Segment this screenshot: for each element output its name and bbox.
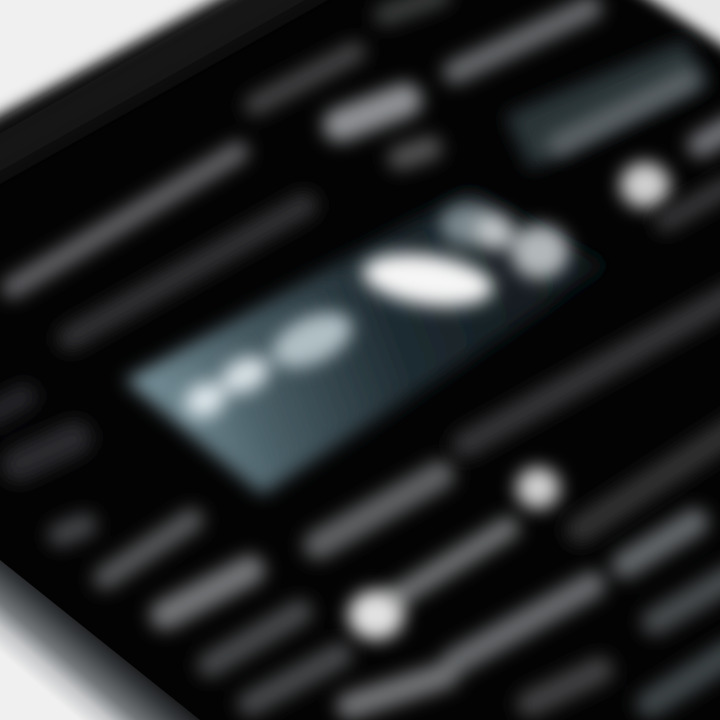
upper interface streaks [12,0,590,338]
lower bright dots [348,467,560,640]
right diagonal dark rows [465,288,720,530]
device edge highlights [0,0,370,720]
lower interface streaks [0,396,720,706]
card small light labels [179,301,361,424]
white background corners [0,0,720,136]
central highlighted card [125,190,610,495]
card highlight: large white blob [359,204,569,314]
upper right panel [505,40,720,222]
